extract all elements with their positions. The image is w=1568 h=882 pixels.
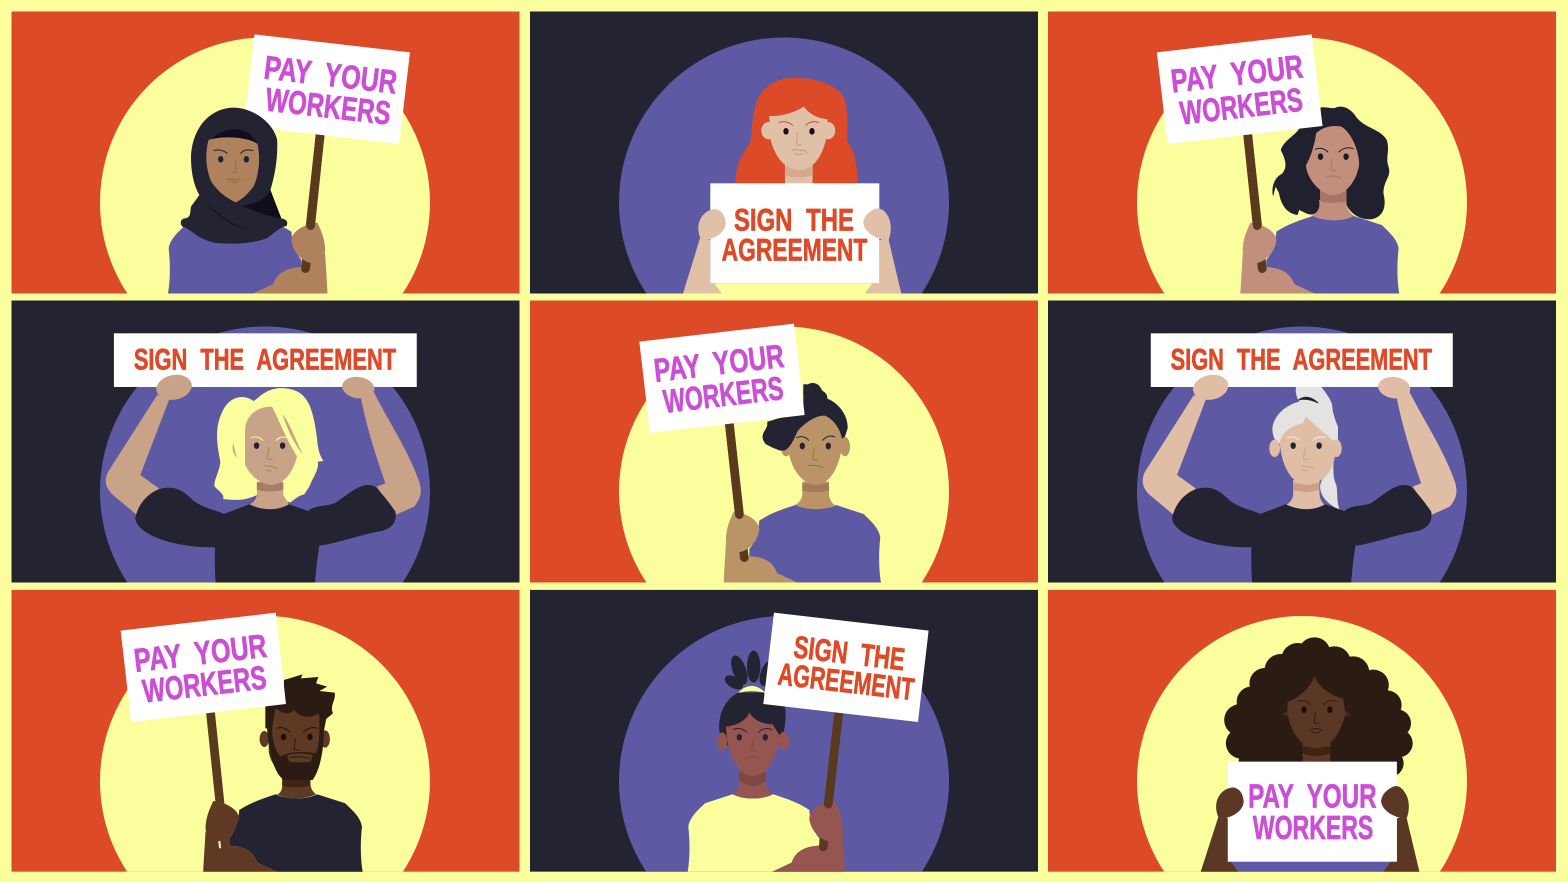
sign: sign the agreement: AGREEMENT xyxy=(722,233,867,268)
shirt and raised arm xyxy=(1240,135,1399,294)
sign: sign the agreement xyxy=(710,183,879,283)
black t-shirt xyxy=(1172,485,1432,583)
arms xyxy=(1143,392,1456,515)
sign: pay your workers: PAY YOUR xyxy=(1248,779,1377,816)
person: hair bun, neck and face xyxy=(717,651,789,798)
sign: sign the agreement: SIGN THE xyxy=(734,202,854,237)
arms xyxy=(1201,817,1419,872)
person: afro hair xyxy=(1224,637,1413,777)
sign: pay your workers xyxy=(1157,34,1322,144)
sign: sign the agreement xyxy=(1151,333,1453,387)
hands xyxy=(1216,786,1409,819)
sign: pay your workers: WORKERS xyxy=(263,82,393,133)
panel: bearded man with pay your workers sign xyxy=(12,590,520,872)
sign: pay your workers: WORKERS xyxy=(1178,82,1305,133)
person: blonde hair and face xyxy=(214,388,323,510)
panel: white-haired woman holding sign overhead xyxy=(1048,300,1556,583)
sign: sign the agreement: SIGN THE AGREEMENT xyxy=(134,344,396,377)
arms xyxy=(683,238,901,294)
sign: sign the agreement: SIGN THE xyxy=(792,630,907,677)
sign: pay your workers xyxy=(244,34,410,144)
sign: pay your workers: WORKERS xyxy=(141,660,268,711)
panel: woman in hijab with pay your workers sign xyxy=(12,12,520,294)
person: curly hair, neck and face xyxy=(763,383,850,510)
sign: pay your workers: WORKERS xyxy=(661,369,785,420)
person: hair, beard and face xyxy=(260,674,335,799)
panel: curly-haired woman with pay your workers sign xyxy=(530,300,1038,583)
sign: pay your workers: PAY YOUR xyxy=(1169,49,1305,101)
person: wavy hair, neck and face xyxy=(1272,107,1389,220)
panel: blonde woman holding sign overhead xyxy=(12,300,520,583)
sign: pay your workers: PAY YOUR xyxy=(132,628,269,680)
black t-shirt xyxy=(135,485,396,583)
shirt and raised arm xyxy=(688,713,845,872)
panel: woman with hair bun and sign the agreement sign xyxy=(530,590,1038,872)
sign: pay your workers: PAY YOUR xyxy=(652,337,786,389)
person: hijab and face xyxy=(181,108,287,244)
sign: sign the agreement xyxy=(114,333,417,387)
shirt hem xyxy=(714,283,873,294)
shirt and raised arm xyxy=(203,713,363,872)
person: face and neck xyxy=(1281,677,1351,763)
sign: pay your workers: WORKERS xyxy=(1253,810,1373,847)
panel: red-haired woman holding sign agreement sign xyxy=(530,12,1038,294)
person: red hair and face xyxy=(736,78,858,185)
shirt and raised arm xyxy=(168,135,328,294)
panel: dark-haired woman with pay your workers sign xyxy=(1048,12,1556,294)
sign: pay your workers: PAY YOUR xyxy=(262,50,399,102)
sign: sign the agreement: SIGN THE AGREEMENT xyxy=(1171,344,1432,377)
sign: sign the agreement xyxy=(763,613,929,722)
hands xyxy=(698,208,891,241)
sign: pay your workers xyxy=(639,324,805,433)
sign: sign the agreement: AGREEMENT xyxy=(776,657,916,707)
person: white ponytail and face xyxy=(1269,385,1342,510)
panel: woman with big curly hair holding pay your workers sign xyxy=(1048,590,1556,872)
shirt hem xyxy=(1231,862,1390,872)
shirt and raised arm xyxy=(724,424,881,583)
hands xyxy=(1193,374,1410,400)
arms xyxy=(106,392,421,515)
sign: pay your workers xyxy=(121,613,286,722)
hands xyxy=(156,374,374,400)
sign: pay your workers xyxy=(1228,762,1397,862)
